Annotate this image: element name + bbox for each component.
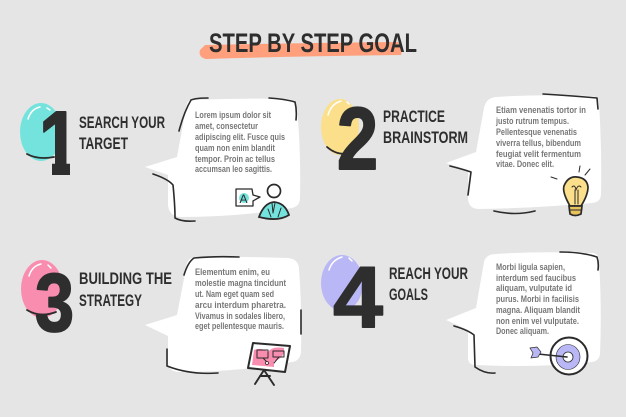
body text: interdum sed faucibus	[496, 273, 576, 284]
icon: light bulb	[551, 166, 590, 216]
body text: quam non enim blandit	[195, 143, 276, 154]
heading: TARGET	[79, 135, 128, 153]
heading	[79, 114, 165, 153]
speech bubble	[145, 257, 301, 373]
body text: Vivamus in sodales libero,	[195, 311, 285, 322]
number 4 badge: 4	[333, 248, 383, 346]
body text: Lorem ipsum dolor sit	[195, 110, 272, 121]
body text	[195, 267, 287, 332]
body text: amet, consectetur	[195, 121, 258, 132]
icon: presentation board	[248, 343, 290, 385]
body text: arcu interdum pharetra.	[195, 300, 286, 311]
number 1 badge: 1	[39, 93, 79, 194]
icon: target with arrow	[530, 338, 588, 374]
body text: accumsan leo sagittis.	[195, 164, 272, 175]
heading: GOALS	[389, 286, 428, 304]
panel: step 2	[321, 90, 601, 216]
body text: Donec aliquam.	[496, 326, 549, 337]
title highlight	[200, 42, 402, 59]
body text: purus. Morbi in facilisis	[496, 294, 579, 305]
heading	[383, 108, 468, 147]
icon: person with speech bubble	[236, 184, 289, 219]
body text: magna. Aliquam blandit	[496, 305, 581, 316]
body text: vitae. Donec elit.	[496, 159, 554, 170]
body text: Elementum enim, eu	[195, 267, 270, 278]
body text: justo rutrum tempus.	[495, 116, 569, 127]
panel: step 1	[20, 93, 300, 221]
heading: SEARCH YOUR	[79, 114, 165, 132]
body text: eget pellentesque mauris.	[195, 321, 284, 332]
heading: BRAINSTORM	[383, 129, 468, 147]
heading: PRACTICE	[383, 108, 445, 126]
speech bubble	[446, 94, 601, 214]
panel: step 3	[21, 257, 301, 385]
number 1 badge	[20, 103, 70, 175]
speech bubble	[446, 252, 601, 373]
body text: molestie magna tincidunt	[195, 278, 287, 289]
speech bubble	[145, 98, 300, 221]
body text: ut. Nam eget quam sed	[195, 289, 274, 300]
heading: STRATEGY	[79, 292, 142, 310]
body text: aliquam, vulputate id	[496, 283, 572, 294]
panel: step 4	[321, 248, 601, 374]
icon: person with speech bubble: A	[240, 192, 248, 206]
heading	[79, 270, 172, 310]
heading: BUILDING THE	[79, 270, 172, 288]
heading	[389, 265, 468, 304]
body text	[496, 262, 581, 337]
number 3 badge: 3	[35, 258, 74, 349]
body text: non enim vel vulputate.	[496, 316, 579, 327]
number 2 badge: 2	[337, 90, 378, 189]
body text	[495, 105, 586, 170]
title	[200, 28, 417, 59]
heading: REACH YOUR	[389, 265, 468, 283]
body text: feugiat velit fermentum	[496, 149, 581, 160]
body text	[195, 110, 285, 175]
body text: Morbi ligula sapien,	[496, 262, 565, 273]
body text: viverra tellus, bibendum	[496, 138, 581, 149]
body text: adipiscing elit. Fusce quis	[195, 132, 285, 143]
body text: tempor. Proin ac tellus	[195, 154, 275, 165]
body text: Etiam venenatis tortor in	[496, 105, 586, 116]
title text: STEP BY STEP GOAL	[209, 28, 417, 58]
body text: Pellentesque venenatis	[496, 127, 577, 138]
